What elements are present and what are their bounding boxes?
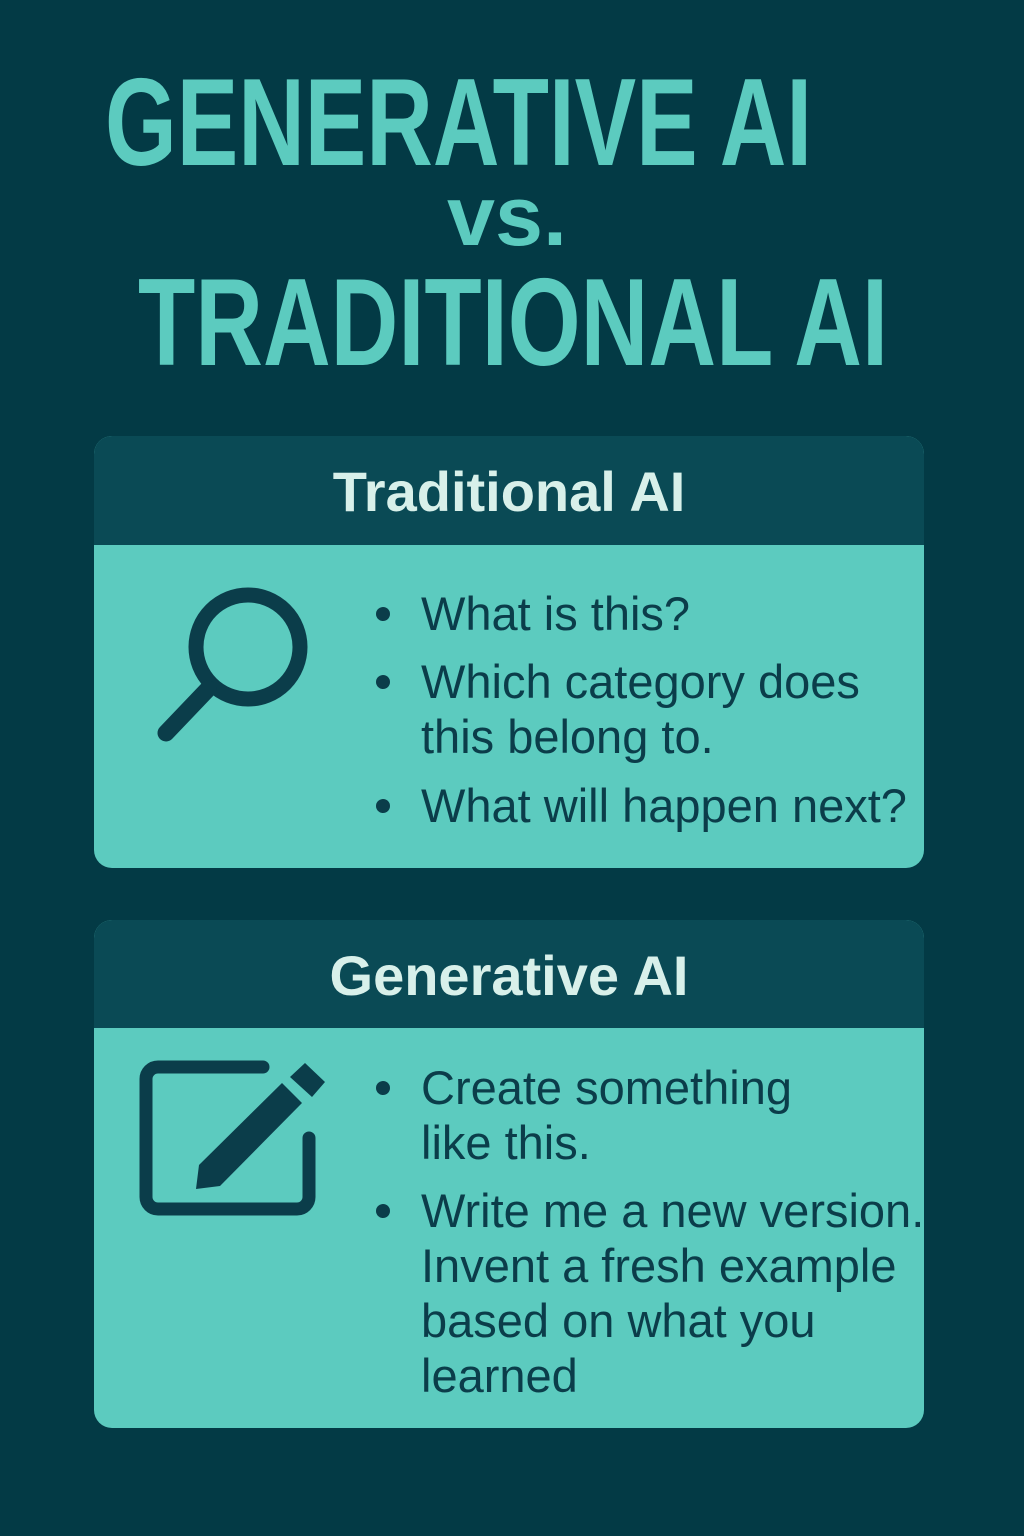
header: Generative AI: Generative AI [330, 944, 688, 1007]
panel: traditional AI: this belong to. [421, 710, 714, 763]
panel: traditional AI: What is this? [421, 587, 690, 640]
panel: generative AI [94, 920, 924, 1428]
header: Traditional AI [94, 436, 924, 545]
panel: generative AI: Create something [421, 1061, 792, 1114]
icon: magnifier [158, 588, 308, 742]
bullet list [376, 587, 907, 832]
panel: generative AI: learned [421, 1349, 578, 1402]
title: vs. [447, 169, 567, 263]
panel: generative AI: like this. [421, 1116, 591, 1169]
panel: generative AI: Invent a fresh example [421, 1239, 896, 1292]
panel: traditional AI: Which category does [421, 655, 860, 708]
header: Traditional AI: Traditional AI [333, 460, 685, 523]
header: Generative AI [94, 920, 924, 1028]
panel: generative AI: based on what you [421, 1294, 816, 1347]
title [105, 54, 888, 392]
panel: traditional AI: What will happen next? [421, 779, 907, 832]
bullet list [376, 1061, 924, 1402]
icon: pencil edit [140, 1060, 325, 1216]
panel: traditional AI [94, 436, 924, 868]
panel: generative AI: Write me a new version. [421, 1184, 924, 1237]
